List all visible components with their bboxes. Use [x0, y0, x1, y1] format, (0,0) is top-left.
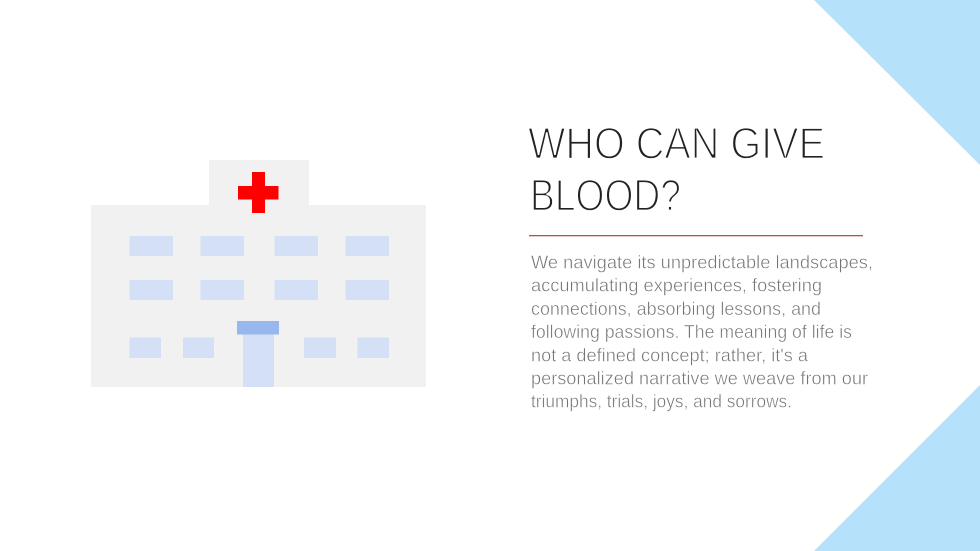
title: BLOOD?	[530, 172, 681, 220]
decorative triangle: top right	[814, 0, 980, 165]
body text: following passions. The meaning of life is	[531, 322, 852, 342]
hospital top block	[209, 160, 309, 205]
door canopy	[237, 321, 279, 334]
hospital main block	[91, 205, 426, 387]
body text: accumulating experiences, fostering	[531, 276, 822, 296]
lower row of windows	[130, 338, 389, 358]
body text: triumphs, trials, joys, and sorrows.	[531, 392, 792, 412]
decorative triangle: bottom right	[814, 385, 980, 551]
body text: connections, absorbing lessons, and	[531, 299, 821, 319]
body text: We navigate its unpredictable landscapes,	[531, 252, 873, 272]
title	[528, 120, 825, 220]
body text: personalized narrative we weave from our	[531, 368, 868, 388]
title divider line	[529, 235, 863, 236]
middle row of windows	[130, 280, 389, 300]
icon: hospital building	[91, 160, 426, 387]
body text: not a defined concept; rather, it's a	[531, 345, 809, 365]
upper row of windows	[130, 236, 389, 256]
body text	[531, 252, 873, 412]
hospital door	[243, 334, 274, 387]
title: WHO CAN GIVE	[528, 120, 825, 168]
icon: red cross	[238, 172, 278, 213]
